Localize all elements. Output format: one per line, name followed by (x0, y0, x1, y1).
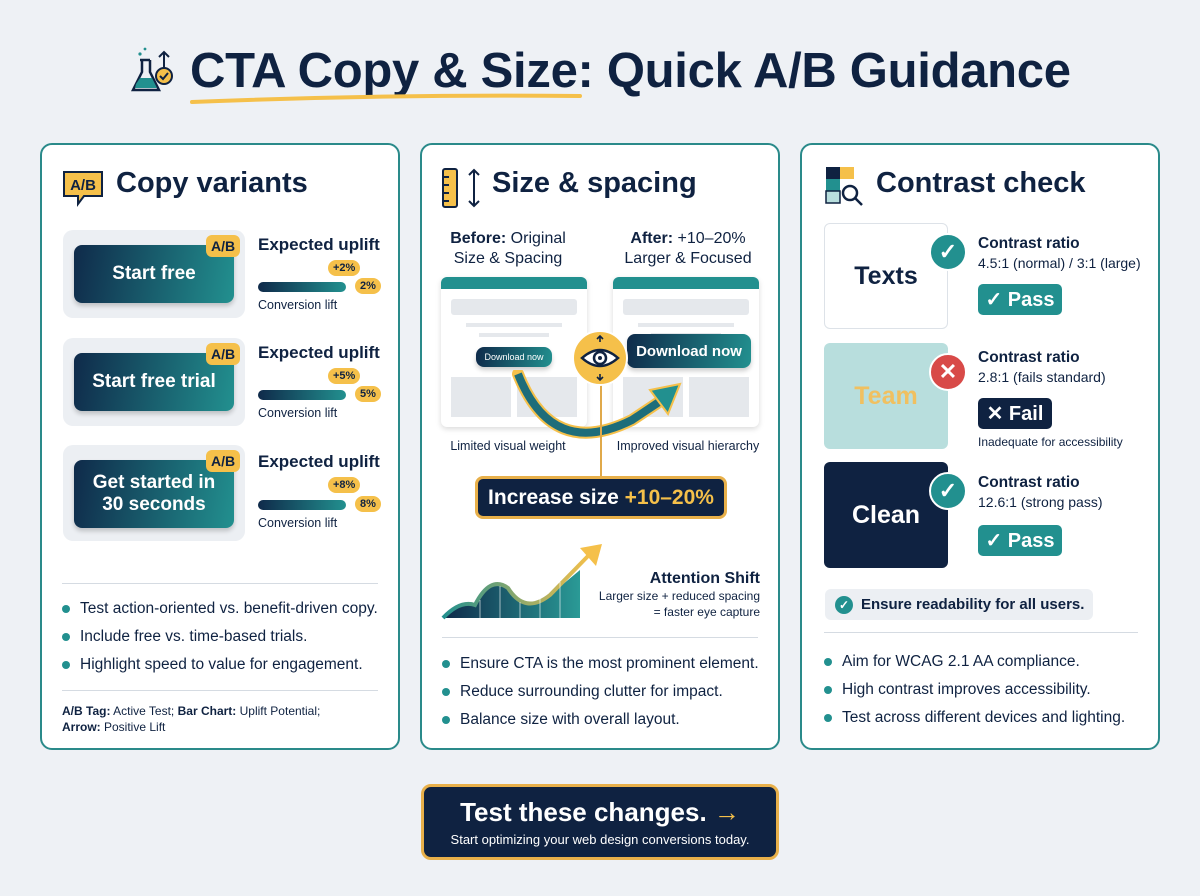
heading: Contrast check (876, 167, 1086, 199)
variant 2: 5% (360, 388, 376, 400)
row: team: Inadequate for accessibility (978, 435, 1123, 449)
variant 3: 30 seconds (102, 494, 206, 515)
attention shift text: Attention Shift (650, 570, 760, 587)
variant 3: Expected uplift (258, 452, 380, 471)
bullets: Highlight speed to value for engagement. (80, 656, 363, 673)
icon: A/B speech bubble (63, 171, 103, 207)
variant 3: Conversion lift (258, 516, 337, 530)
row: team: Team (854, 382, 918, 410)
variant 2: Expected uplift (258, 343, 380, 362)
variant 1 (63, 230, 381, 318)
row: clean: Clean (852, 500, 920, 528)
large download button (627, 334, 751, 368)
variant 1: Conversion lift (258, 298, 337, 312)
panel: copy variants (40, 143, 400, 750)
increase size callout: +10–20% (625, 486, 714, 508)
bullets: High contrast improves accessibility. (842, 681, 1091, 698)
bullets: Test across different devices and lighting. (842, 709, 1125, 726)
large download button: Download now (636, 342, 742, 360)
icon: flask (131, 48, 173, 92)
row: texts: ✓ Pass (985, 289, 1055, 311)
after browser mock (613, 277, 759, 427)
variant 1: Expected uplift (258, 235, 380, 254)
before label (450, 230, 566, 267)
row: team: 2.8:1 (fails standard) (978, 369, 1106, 385)
row: team: Contrast ratio (978, 349, 1080, 366)
footnote: Arrow: Positive Lift (62, 720, 165, 734)
variant 3: 8% (360, 498, 376, 510)
increase size callout: Increase size (488, 486, 619, 508)
row: clean: ✓ Pass (985, 530, 1055, 552)
panel: contrast check (800, 143, 1160, 750)
variant 2: A/B (211, 346, 235, 362)
increase size callout (475, 476, 727, 519)
row: texts: 4.5:1 (normal) / 3:1 (large) (978, 255, 1141, 271)
after label: After: +10–20% (630, 230, 746, 247)
before browser mock: Download now (484, 352, 544, 362)
readability pill (825, 589, 1093, 620)
bullets (442, 655, 759, 728)
row: team: ✕ Fail (987, 403, 1043, 425)
row: clean (824, 462, 1103, 568)
variant 1: Start free (112, 263, 196, 284)
bullets (62, 600, 378, 673)
bullets: Include free vs. time-based trials. (80, 628, 307, 645)
bullets: Test action-oriented vs. benefit-driven copy. (80, 600, 378, 617)
bullets: Ensure CTA is the most prominent element. (460, 655, 759, 672)
variant 3: A/B (211, 453, 235, 469)
variant 1: A/B (211, 238, 235, 254)
footer CTA (421, 784, 779, 860)
variant 2 (63, 338, 381, 426)
chart: attention shift (442, 544, 602, 620)
bullets: Aim for WCAG 2.1 AA compliance. (842, 653, 1080, 670)
panel: size & spacing (420, 143, 780, 750)
variant 2: Start free trial (92, 371, 216, 392)
variant 3: +8% (333, 479, 355, 491)
attention shift text: Larger size + reduced spacing (599, 589, 760, 603)
title: CTA Copy & Size: Quick A/B Guidance (190, 44, 1071, 98)
bullets (824, 653, 1125, 726)
readability pill: Ensure readability for all users. (861, 596, 1084, 613)
row: texts (824, 223, 1141, 329)
footer CTA: Test these changes. → (460, 797, 740, 827)
row: team (824, 343, 1123, 449)
icon: eye (572, 330, 628, 386)
row: clean: 12.6:1 (strong pass) (978, 494, 1103, 510)
footer CTA: Start optimizing your web design conversions today. (451, 832, 749, 847)
variant 2: +5% (333, 370, 355, 382)
icon: A/B speech bubble: A/B (70, 177, 96, 194)
bullets: Reduce surrounding clutter for impact. (460, 683, 723, 700)
row: texts: Contrast ratio (978, 235, 1080, 252)
after label: Larger & Focused (624, 250, 752, 267)
variant 1: +2% (333, 262, 355, 274)
footnote (62, 704, 320, 734)
row: team: ✕ (939, 359, 957, 384)
icon: ruler (442, 168, 480, 208)
heading: Size & spacing (492, 167, 697, 199)
heading: Copy variants (116, 167, 308, 199)
before browser mock (441, 277, 587, 427)
caption after: Improved visual hierarchy (617, 439, 759, 453)
row: clean: Contrast ratio (978, 474, 1080, 491)
row: clean: ✓ (939, 478, 957, 503)
icon: palette magnifier (825, 167, 863, 206)
row: texts: Texts (854, 262, 918, 290)
before label: Size & Spacing (454, 250, 562, 267)
readability pill: ✓ (839, 598, 849, 612)
attention shift text: = faster eye capture (654, 605, 760, 619)
caption before: Limited visual weight (450, 439, 566, 453)
variant 3: Get started in (93, 472, 215, 493)
arrow: curved growth (512, 370, 682, 439)
row: texts: ✓ (939, 239, 957, 264)
footnote: A/B Tag: Active Test; Bar Chart: Uplift Potential; (62, 704, 320, 718)
vertical connector (600, 385, 602, 477)
before label: Before: Original (450, 230, 566, 247)
bullets: Balance size with overall layout. (460, 711, 680, 728)
attention shift text (599, 570, 760, 619)
variant 2: Conversion lift (258, 406, 337, 420)
variant 1: 2% (360, 280, 376, 292)
variant 3 (63, 445, 381, 541)
after label (624, 230, 752, 267)
